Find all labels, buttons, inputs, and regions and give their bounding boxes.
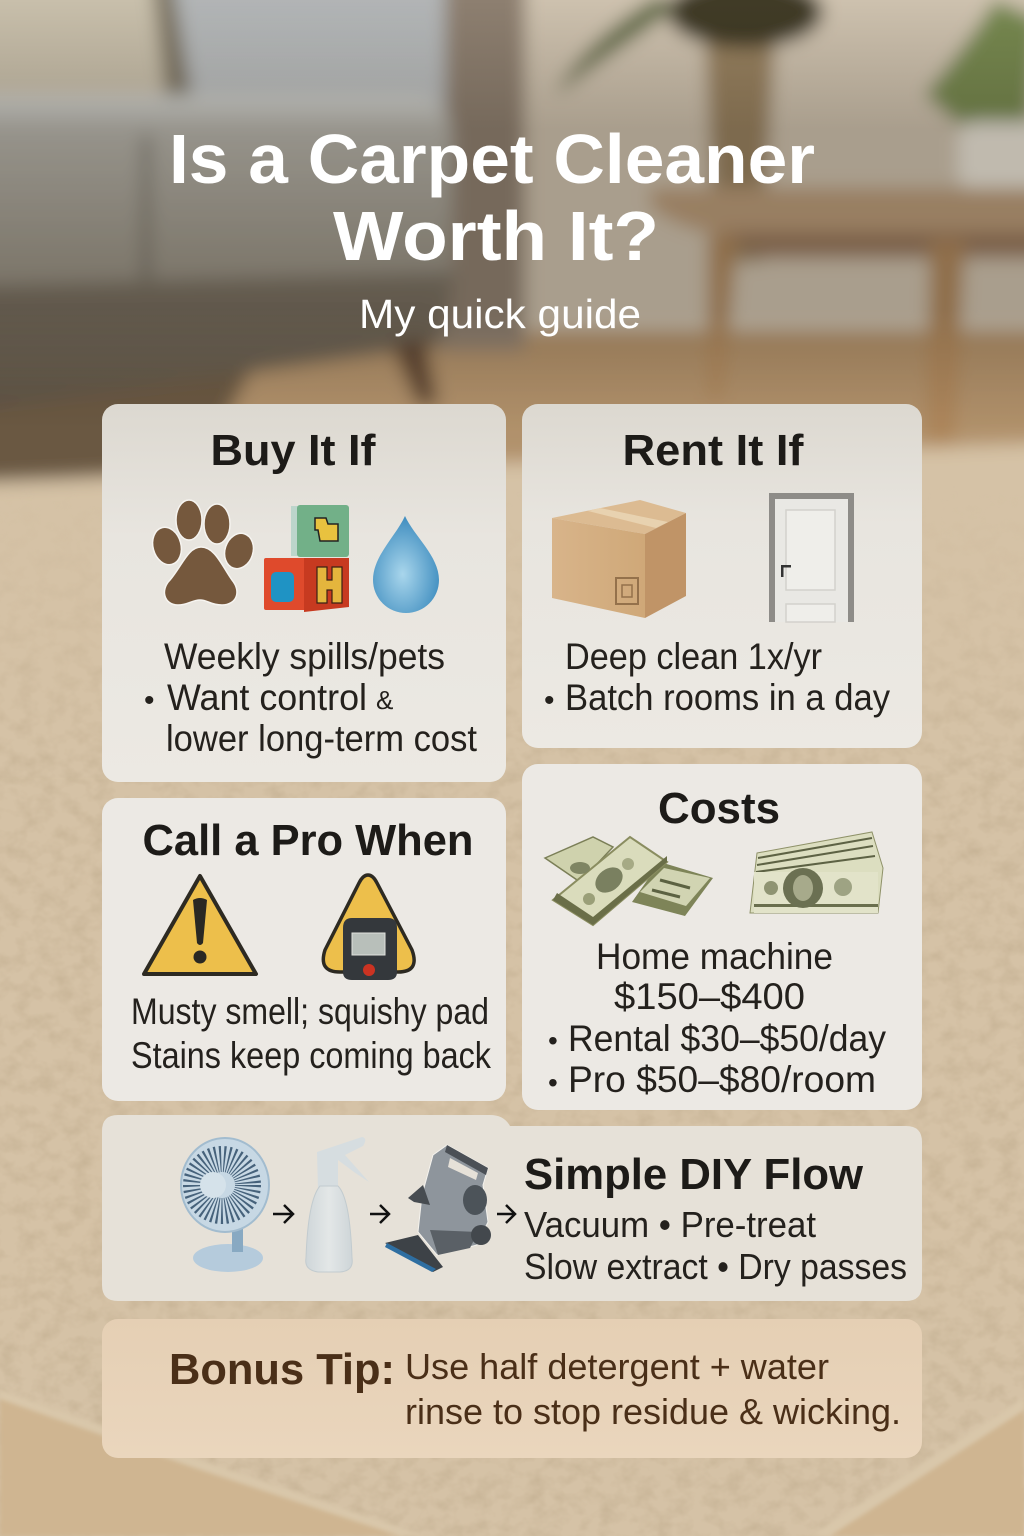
icon: warning triangle <box>144 876 256 974</box>
text: buy reasons: Want control <box>167 677 367 718</box>
subtitle: My quick guide <box>359 291 641 337</box>
panel: call a pro when <box>102 798 506 1101</box>
text: buy reasons: lower long-term cost <box>166 718 478 759</box>
icon: toy blocks <box>264 505 349 612</box>
icon: spray bottle <box>306 1137 369 1272</box>
arrow <box>370 1205 389 1223</box>
text: pro signs: Stains keep coming back <box>131 1035 491 1076</box>
text: rent reasons: Deep clean 1x/yr <box>565 636 822 677</box>
text: buy reasons: • <box>144 684 155 717</box>
icon: desk fan <box>181 1138 269 1272</box>
text: rent reasons: Batch rooms in a day <box>565 677 890 718</box>
text: cost list: • <box>548 1067 558 1098</box>
heading: rent it if: Rent It If <box>622 426 804 475</box>
icon: moisture meter on warning sign <box>323 875 414 980</box>
panel: bonus tip <box>102 1319 922 1458</box>
panel: costs <box>522 764 922 1110</box>
text: cost list: Home machine <box>596 936 833 977</box>
text: bonus tip body <box>405 1346 901 1432</box>
title: Worth It? <box>333 197 659 275</box>
text: DIY steps <box>524 1204 907 1287</box>
icon: white door <box>769 493 854 622</box>
text: pro signs <box>131 991 491 1076</box>
icon: carpet extractor <box>385 1145 491 1272</box>
text: pro signs: Musty smell; squishy pad <box>131 991 489 1032</box>
decorative dim overlay <box>0 0 1024 430</box>
text: cost list <box>548 936 886 1100</box>
text: cost list: $150–$400 <box>614 976 805 1017</box>
text: rent reasons: • <box>544 684 555 717</box>
panel: buy it if <box>102 404 506 782</box>
heading: call a pro when: Call a Pro When <box>142 816 474 865</box>
text: cost list: • <box>548 1025 558 1056</box>
text: rent reasons <box>544 636 890 718</box>
text: cost list: Rental $30–$50/day <box>568 1018 886 1059</box>
heading: buy it if: Buy It If <box>210 426 376 475</box>
text: bonus tip body: Use half detergent + water <box>405 1346 829 1387</box>
title <box>169 120 815 275</box>
arrow <box>273 1205 293 1223</box>
text: DIY steps: Slow extract • Dry passes <box>524 1246 907 1287</box>
title: Is a Carpet Cleaner <box>169 120 815 198</box>
panel: rent it if <box>522 404 922 748</box>
heading: costs: Costs <box>658 784 780 833</box>
arrow <box>497 1205 515 1223</box>
text: buy reasons <box>144 636 478 759</box>
text: buy reasons: & <box>376 685 393 715</box>
icon: paw print <box>149 500 258 605</box>
heading: simple DIY flow: Simple DIY Flow <box>524 1150 864 1199</box>
text: DIY steps: Vacuum • Pre-treat <box>524 1204 816 1245</box>
icon: cash stack right <box>750 832 883 913</box>
icon: cardboard box <box>552 500 686 618</box>
text: bonus tip body: rinse to stop residue & wicking. <box>405 1391 901 1432</box>
icon: water drop <box>373 516 439 613</box>
heading: bonus tip: Bonus Tip: <box>169 1345 395 1394</box>
panel: simple DIY flow <box>102 1115 922 1301</box>
text: cost list: Pro $50–$80/room <box>568 1059 876 1100</box>
text: buy reasons: Weekly spills/pets <box>164 636 445 677</box>
icon: cash stack left <box>545 837 713 925</box>
